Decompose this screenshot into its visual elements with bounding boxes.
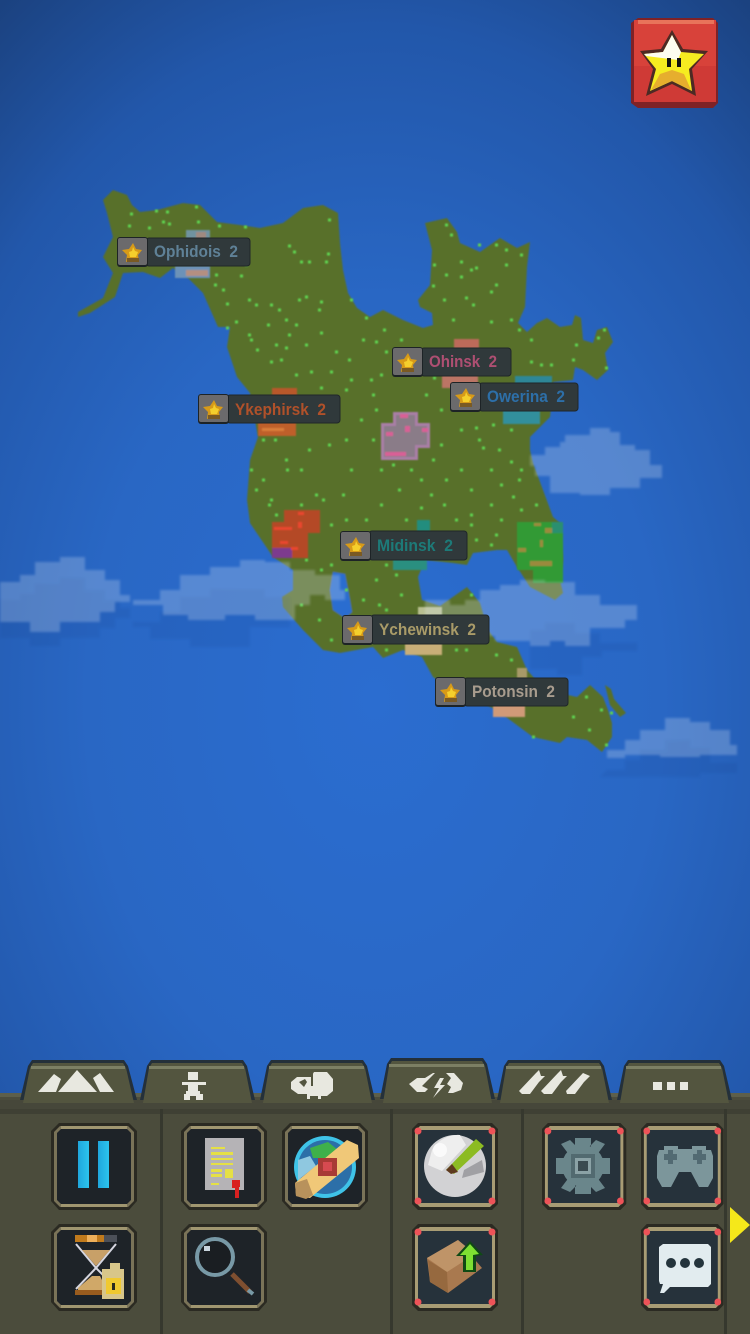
tree dots [128, 207, 613, 745]
label: Potonsin [435, 677, 568, 707]
label: Midinsk [340, 531, 467, 561]
cloud: middle west [133, 560, 345, 620]
cloud shadows [0, 578, 737, 777]
settlement: Potonsin [493, 668, 527, 717]
tab: creatures [140, 1060, 255, 1103]
tab: bombs [497, 1060, 612, 1103]
label: Midinsk: Midinsk 2 [377, 537, 453, 555]
bottom toolbar panel [0, 1093, 750, 1334]
button: upload box [412, 1224, 498, 1311]
button: custom world pencil [412, 1123, 498, 1210]
settlement: Ophidois [175, 230, 210, 278]
label: Ohinsk: Ohinsk 2 [429, 353, 497, 371]
settlement: Owerina [503, 376, 552, 424]
settlement: Ohinsk [442, 339, 479, 388]
button: magnifier [181, 1224, 267, 1311]
label: Owerina: Owerina 2 [487, 388, 565, 406]
tab: more [617, 1060, 732, 1103]
tab: powers [380, 1058, 495, 1103]
button: settings gear [542, 1123, 626, 1210]
label: Ykephirsk [198, 394, 340, 424]
label: Ohinsk [392, 347, 511, 377]
label: Ophidois: Ophidois 2 [154, 243, 238, 261]
button: gamepad [641, 1123, 724, 1210]
label: Owerina [450, 382, 578, 412]
star button [631, 18, 718, 108]
settlement: Midinsk [393, 520, 430, 570]
cloud: east [530, 428, 662, 495]
settlement: red city [272, 510, 320, 558]
button: pause [51, 1123, 137, 1210]
cloud: south east [607, 718, 737, 758]
settlement: Ychewinsk [405, 607, 442, 655]
settlement: Ykephirsk [258, 388, 297, 436]
label: Ykephirsk: Ykephirsk 2 [235, 401, 326, 419]
label: Ychewinsk [342, 615, 489, 645]
cloud: far west [0, 557, 130, 632]
tab: terrain [20, 1060, 137, 1103]
cloud: middle east [425, 580, 637, 646]
settlement: purple city [381, 412, 430, 460]
button: document [181, 1123, 267, 1210]
label: Ychewinsk: Ychewinsk 2 [379, 621, 476, 639]
settlement: green city [517, 522, 563, 583]
tab: animals [260, 1060, 375, 1103]
button: hourglass locked [51, 1224, 137, 1311]
button: chat bubble [641, 1224, 724, 1311]
label: Potonsin: Potonsin 2 [472, 683, 555, 701]
label: Ophidois [117, 237, 250, 267]
arrow: next page [730, 1207, 750, 1243]
landmass [78, 190, 626, 752]
button: world scroll [282, 1123, 368, 1210]
